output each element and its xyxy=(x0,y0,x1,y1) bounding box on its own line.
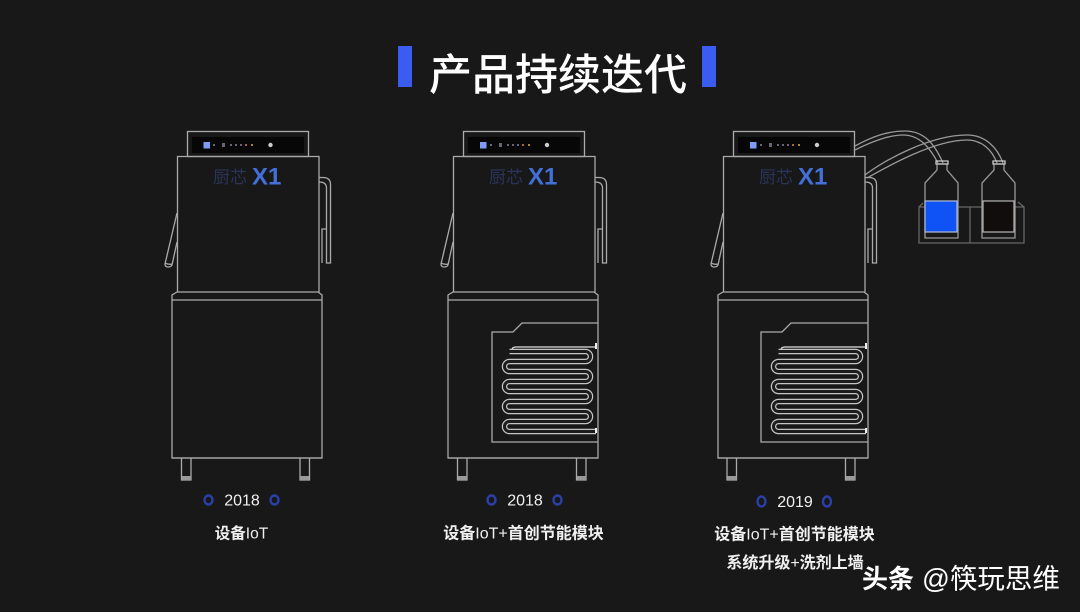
collar and cabinet xyxy=(172,292,322,458)
logo: X1 xyxy=(528,164,557,190)
machine: 2019 with wall-mounted detergent xyxy=(711,131,1024,480)
control panel xyxy=(464,132,584,156)
right handle xyxy=(595,178,606,263)
machine body xyxy=(724,156,865,292)
hoses xyxy=(855,131,1003,178)
energy module housing xyxy=(492,323,598,442)
control panel xyxy=(734,132,854,156)
bottle: blue detergent xyxy=(925,161,958,238)
collar and cabinet xyxy=(448,292,598,458)
legs xyxy=(182,458,310,480)
right handle xyxy=(865,178,876,263)
control panel xyxy=(188,132,308,156)
coil xyxy=(504,343,597,433)
logo xyxy=(213,164,281,190)
label: 2019 xyxy=(714,494,875,572)
energy module housing xyxy=(761,323,868,442)
label: 2018 IoT: 设备IoT xyxy=(215,524,269,542)
title: 产品持续迭代 xyxy=(429,52,687,100)
left handle xyxy=(165,213,177,267)
coil xyxy=(774,343,867,433)
label: 2018 module: 2018 xyxy=(507,492,543,510)
label: 2019: 设备IoT+首创节能模块 xyxy=(714,524,875,544)
label: 2018 IoT xyxy=(204,492,278,542)
watermark xyxy=(862,563,1060,594)
machine body xyxy=(454,156,595,292)
label: 2019: 2019 xyxy=(777,494,813,511)
logo xyxy=(759,164,827,190)
left handle xyxy=(711,213,723,267)
logo: 厨芯 xyxy=(759,168,793,187)
label: 2018 IoT: 2018 xyxy=(224,492,260,510)
machine: 2018 energy module xyxy=(441,132,606,480)
collar and cabinet xyxy=(718,292,868,458)
left handle xyxy=(441,213,453,267)
logo: 厨芯 xyxy=(213,168,247,187)
right handle xyxy=(319,178,330,263)
logo xyxy=(489,164,557,190)
bottle: dark detergent xyxy=(982,161,1015,238)
logo: X1 xyxy=(252,164,281,190)
logo: 厨芯 xyxy=(489,168,523,187)
label: 2018 module: 设备IoT+首创节能模块 xyxy=(443,524,604,542)
tray xyxy=(919,202,1024,243)
machine: 2018 IoT xyxy=(165,132,330,480)
label: 2019: 系统升级+洗剂上墙 xyxy=(726,553,864,572)
watermark: @筷玩思维 xyxy=(922,563,1060,594)
label: 2018 module xyxy=(443,492,604,542)
logo: X1 xyxy=(798,164,827,190)
legs xyxy=(727,458,855,480)
legs xyxy=(458,458,586,480)
machine body xyxy=(178,156,319,292)
watermark: 头条 xyxy=(862,564,914,594)
